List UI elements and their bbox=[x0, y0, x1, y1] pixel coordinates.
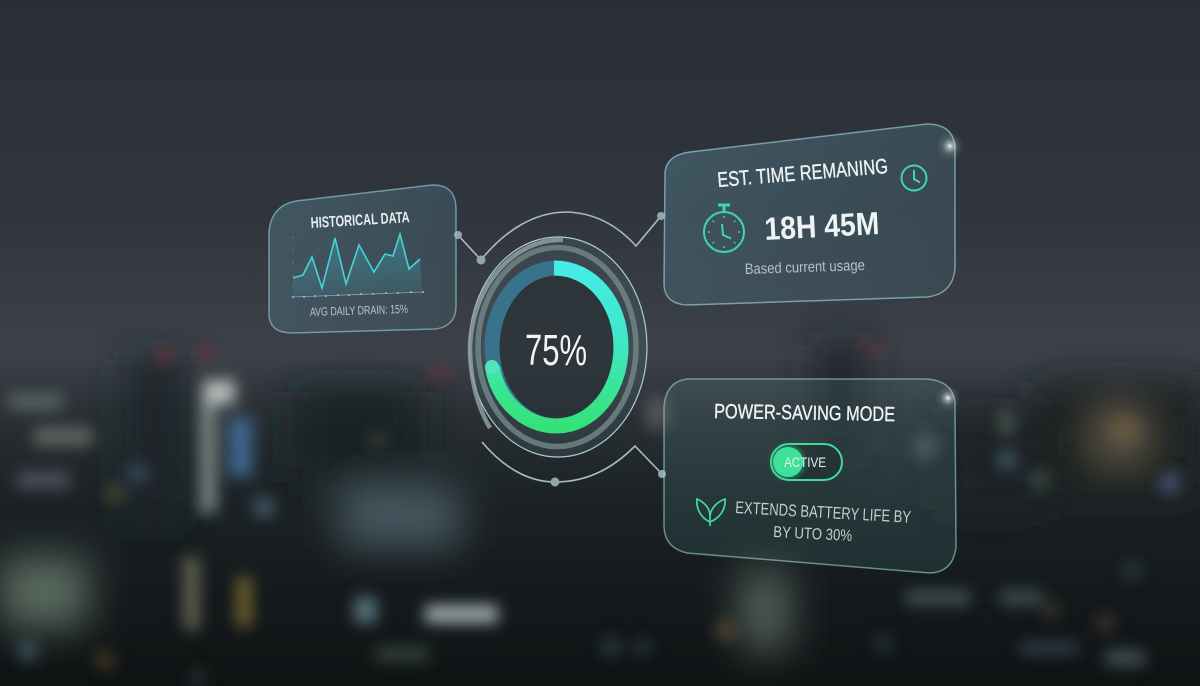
panel: estimated time remaining bbox=[664, 124, 955, 305]
battery level arc 75% bbox=[492, 268, 621, 426]
caption: average daily drain: AVG DAILY DRAIN: 15% bbox=[310, 302, 408, 319]
heading: power-saving mode: POWER-SAVING MODE bbox=[714, 400, 895, 426]
heading: historical data: HISTORICAL DATA bbox=[310, 209, 410, 232]
value: time remaining: 18H 45M bbox=[763, 205, 880, 247]
caption: based on current usage: Based current usage bbox=[745, 257, 865, 278]
central battery gauge bbox=[469, 237, 647, 457]
toggle: active bbox=[771, 444, 842, 480]
text: battery life benefit: EXTENDS BATTERY LIFE BY bbox=[735, 498, 912, 527]
text: battery life benefit bbox=[735, 498, 912, 545]
light glints on panel corners bbox=[935, 132, 964, 411]
panel: historical data bbox=[269, 185, 456, 333]
text: battery life benefit: BY UTO 30% bbox=[773, 524, 853, 545]
battery track bbox=[492, 268, 621, 426]
line chart bbox=[292, 234, 424, 298]
connector lines and nodes bbox=[454, 212, 666, 486]
icon: stopwatch bbox=[704, 205, 744, 252]
panel: power-saving mode bbox=[664, 379, 956, 573]
icon: leaf bbox=[697, 499, 725, 526]
percentage value: 75% bbox=[525, 326, 587, 375]
toggle: active: ACTIVE bbox=[784, 455, 826, 470]
glass ring bbox=[469, 237, 647, 457]
icon: clock bbox=[902, 166, 926, 190]
heading: est. time remaining: EST. TIME REMANING bbox=[717, 155, 889, 192]
